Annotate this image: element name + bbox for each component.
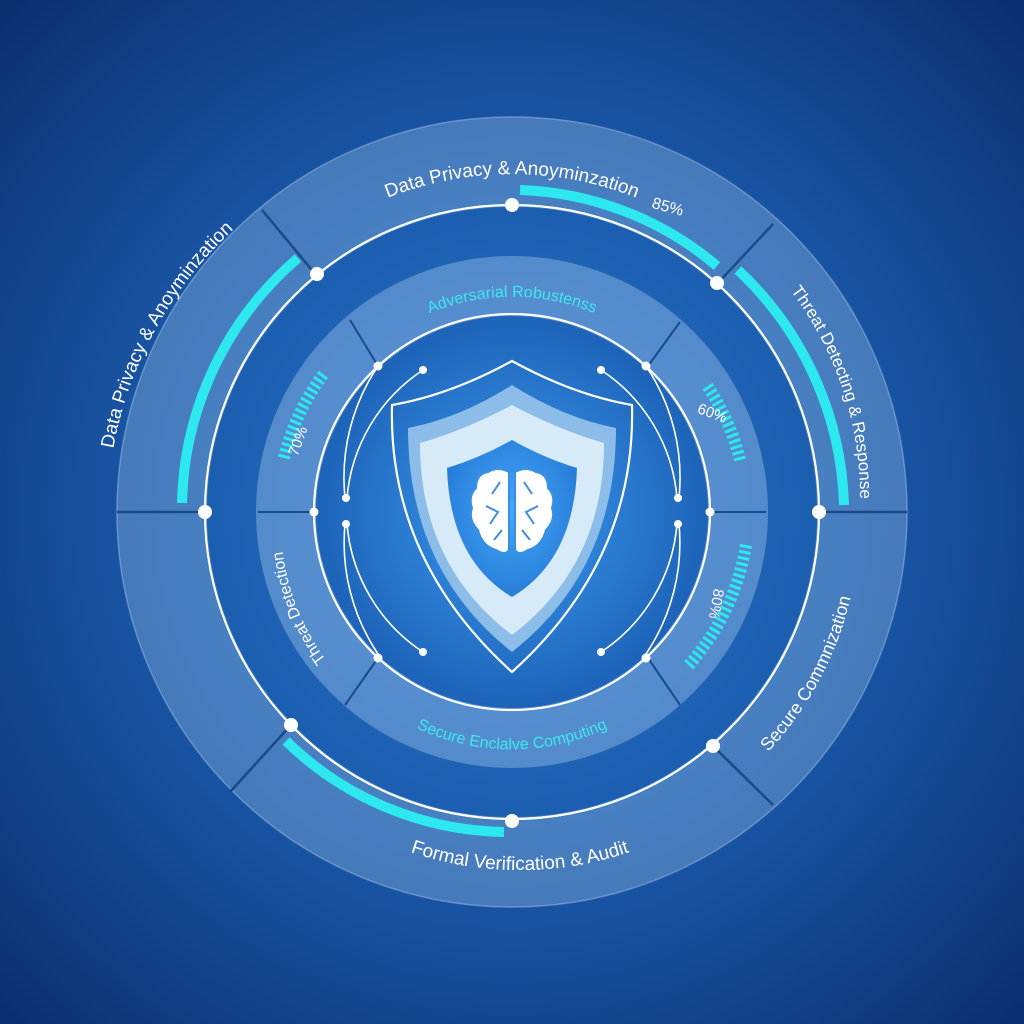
text: Secure Enclalve Computing: [418, 719, 608, 750]
segmented inner bars: [284, 372, 746, 666]
panel: middle ring: [258, 288, 766, 736]
labels: 60%: [695, 400, 729, 427]
labels: Threat Detection: [274, 552, 324, 666]
labels: Data Privacy & Anoyminzation: [100, 224, 233, 448]
text: Adversarial Robustenss: [430, 285, 596, 314]
labels: Data Privacy & Anoyminzation: [384, 161, 638, 198]
labels: 85%: [650, 195, 685, 220]
icon: shield: [392, 361, 632, 672]
icon: brain: [471, 469, 553, 553]
labels: Formal Verification & Audit: [412, 840, 630, 870]
core circle: [316, 316, 708, 708]
labels: 80%: [705, 587, 727, 620]
panel: outer ring: [117, 117, 907, 907]
nodes: [198, 198, 826, 828]
labels: Secure Commnization: [761, 596, 850, 750]
white rings: [205, 205, 819, 819]
labels: 70%: [285, 424, 311, 458]
labels: [100, 161, 870, 870]
labels: Threat Detecting & Response: [793, 284, 870, 498]
cyan progress arcs: [182, 190, 844, 832]
